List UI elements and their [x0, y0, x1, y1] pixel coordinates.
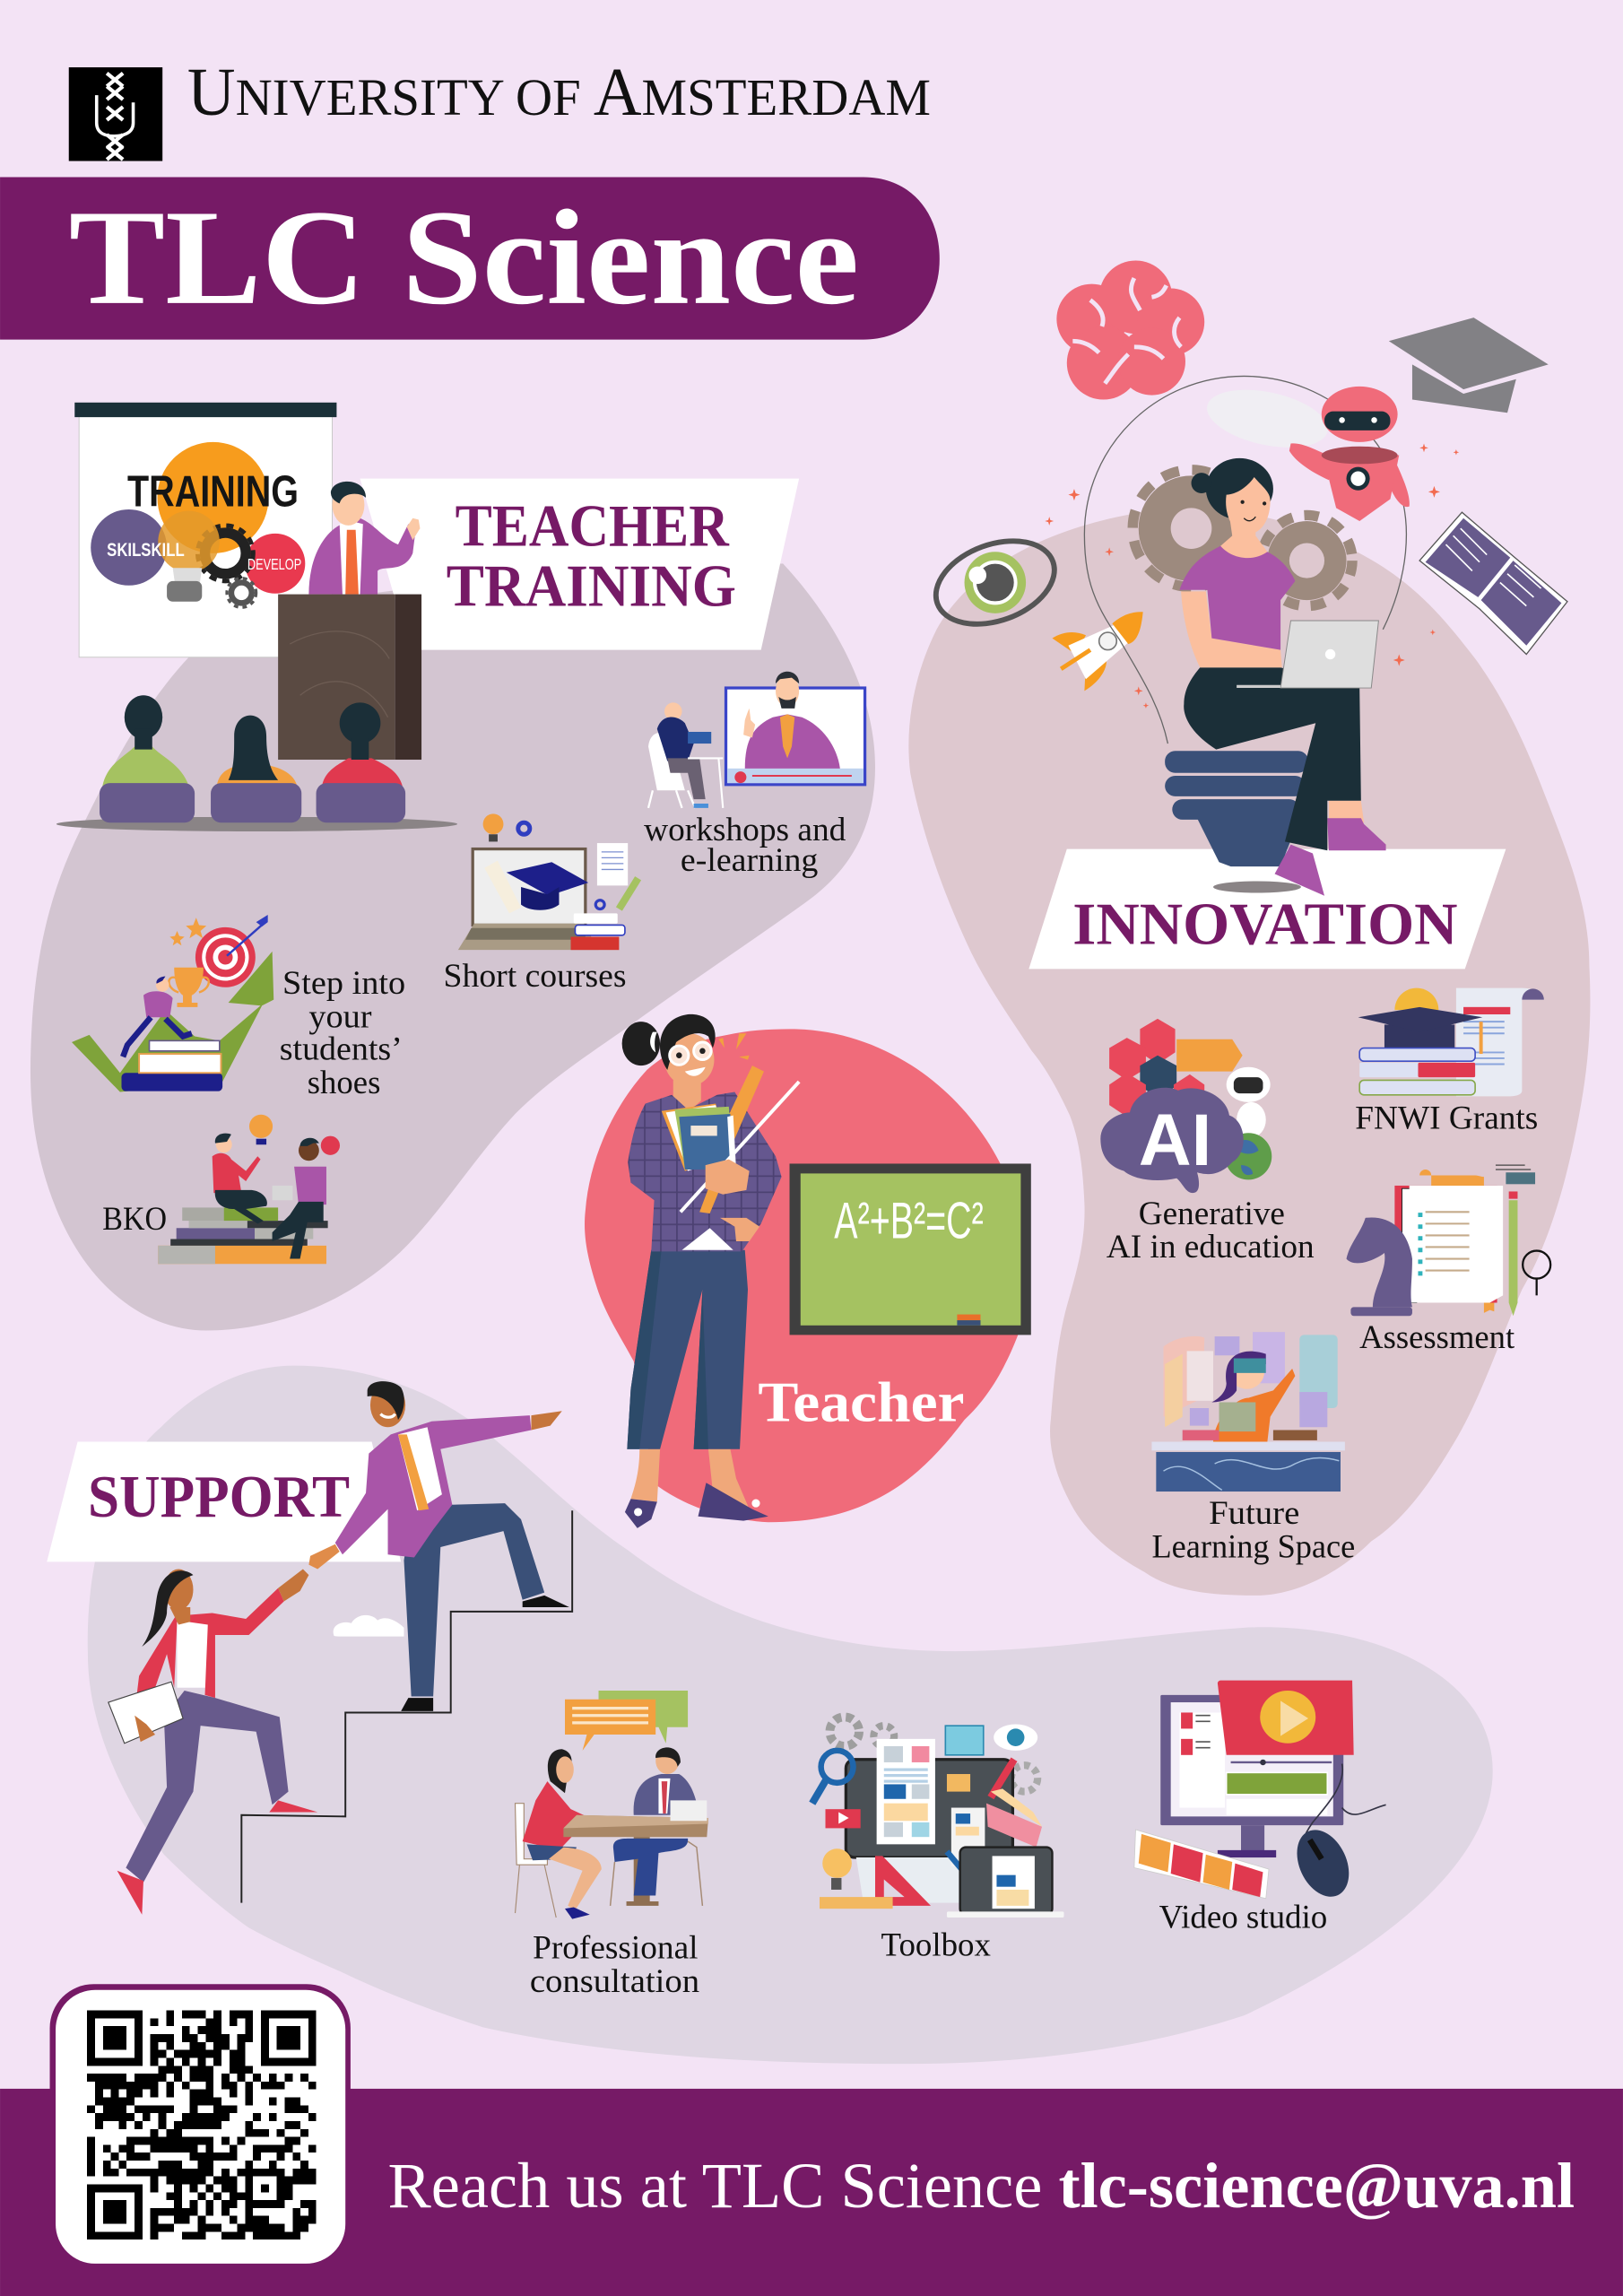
icon: design tools [812, 1717, 1064, 1918]
woman with laptop [1179, 458, 1386, 896]
icon: brain [1056, 261, 1204, 400]
sparkles [1045, 444, 1459, 709]
icon: seated learner [648, 702, 723, 808]
item: BKO [102, 1115, 340, 1264]
heading banner: innovation [1028, 849, 1506, 969]
icon: laptop with graduation cap [458, 813, 638, 950]
panel: teacher training blob [30, 563, 875, 1331]
wordmark: UNIVERSITY OF AMSTERDAM [187, 54, 931, 130]
item: FNWI grants [1355, 988, 1544, 1136]
heading banner: TRAINING [447, 553, 736, 620]
icon: VR learner at desk [1151, 1332, 1345, 1492]
section: teacher training heading illustration [56, 403, 799, 831]
icon: video lesson screen [726, 672, 865, 785]
icon: graduation cap [1389, 317, 1549, 413]
icon: two people at table [516, 1691, 708, 1919]
audience [56, 695, 457, 831]
footer bar [0, 2089, 1623, 2296]
presentation slide: SKILSKILL [107, 540, 185, 561]
item: toolbox [812, 1717, 1064, 1963]
heading banner [360, 479, 799, 650]
item: generative AI in education: AI in education [1107, 1229, 1315, 1265]
item: step into your students' shoes: shoes [308, 1065, 380, 1101]
presentation slide: DEVELOP [247, 555, 301, 573]
icon: AI cloud: AI [1139, 1100, 1211, 1181]
heading banner: TEACHER [456, 493, 729, 560]
central teacher [622, 1014, 1031, 1528]
icon: robot [1202, 380, 1410, 521]
item: short courses [444, 813, 638, 995]
icon: rising arrow with target [72, 915, 273, 1091]
panel: teacher blob [585, 1029, 1028, 1522]
heading banner: SUPPORT [88, 1464, 350, 1530]
label: FNWI Grants [1355, 1100, 1538, 1136]
QR code [50, 1984, 351, 2264]
chalkboard [790, 1163, 1031, 1335]
icon: cap, books and scroll [1358, 988, 1544, 1096]
label: Short courses [444, 958, 627, 995]
teacher figure [622, 1014, 799, 1528]
label: teacher: Teacher [758, 1370, 965, 1434]
label: BKO [102, 1201, 167, 1238]
title banner [0, 177, 940, 340]
icon: AI cloud [1100, 1019, 1271, 1193]
panel: innovation blob [908, 509, 1590, 1596]
label: Toolbox [881, 1926, 991, 1963]
contact line: Reach us at TLC Science tlc-science@uva.nl [388, 2150, 1575, 2222]
chalkboard: A²+B²=C² [834, 1193, 984, 1250]
panel: support blob [88, 1366, 1493, 2064]
icon: rocket [1052, 612, 1143, 691]
title: TLC Science [69, 182, 859, 333]
item: professional consultation [516, 1691, 708, 2000]
icon: eye [924, 526, 1066, 639]
section: innovation illustration [924, 261, 1567, 969]
item: future learning space [1151, 1332, 1355, 1565]
item: assessment [1347, 1165, 1550, 1356]
logo mark [69, 67, 162, 161]
presentation slide [74, 403, 336, 657]
icon: bulb outline [1084, 376, 1406, 744]
item: future learning space: Learning Space [1151, 1528, 1355, 1565]
item: step into your students' shoes: students’ [280, 1031, 403, 1068]
cloud [334, 1615, 404, 1637]
item: step into your students' shoes: your [308, 999, 372, 1036]
woman climbing [108, 1570, 317, 1915]
speaker at podium [308, 482, 420, 595]
label: Video studio [1159, 1899, 1327, 1935]
heading banner [47, 1442, 401, 1561]
icon: monitor, player, film and mouse [1134, 1681, 1386, 1905]
stairs [241, 1510, 572, 1903]
section: support illustration [47, 1381, 572, 1915]
label: Future [1209, 1495, 1299, 1532]
icon: gears [1133, 470, 1352, 606]
icon: two people on books [158, 1115, 340, 1264]
man reaching down [308, 1381, 569, 1711]
heading banner: innovation: INNOVATION [1072, 891, 1458, 958]
item: step into your students' shoes [72, 915, 405, 1101]
item: workshops and e-learning: e-learning [681, 842, 819, 879]
label: Assessment [1359, 1319, 1515, 1356]
label: workshops and [644, 812, 846, 848]
presentation slide: TRAINING [127, 468, 299, 517]
logo: university of amsterdam [69, 54, 931, 161]
icon: bulb base [1165, 751, 1308, 866]
label: Professional [533, 1930, 699, 1967]
label: Step into [282, 965, 405, 1002]
label: Generative [1139, 1196, 1285, 1232]
item: workshops and e-learning [644, 672, 865, 879]
item: generative AI in education [1100, 1019, 1315, 1265]
podium [278, 595, 421, 760]
icon: knight, document and pencil [1347, 1165, 1550, 1316]
item: video studio [1134, 1681, 1386, 1935]
icon: open book [1419, 512, 1567, 655]
item: professional consultation: consultation [530, 1963, 699, 2000]
